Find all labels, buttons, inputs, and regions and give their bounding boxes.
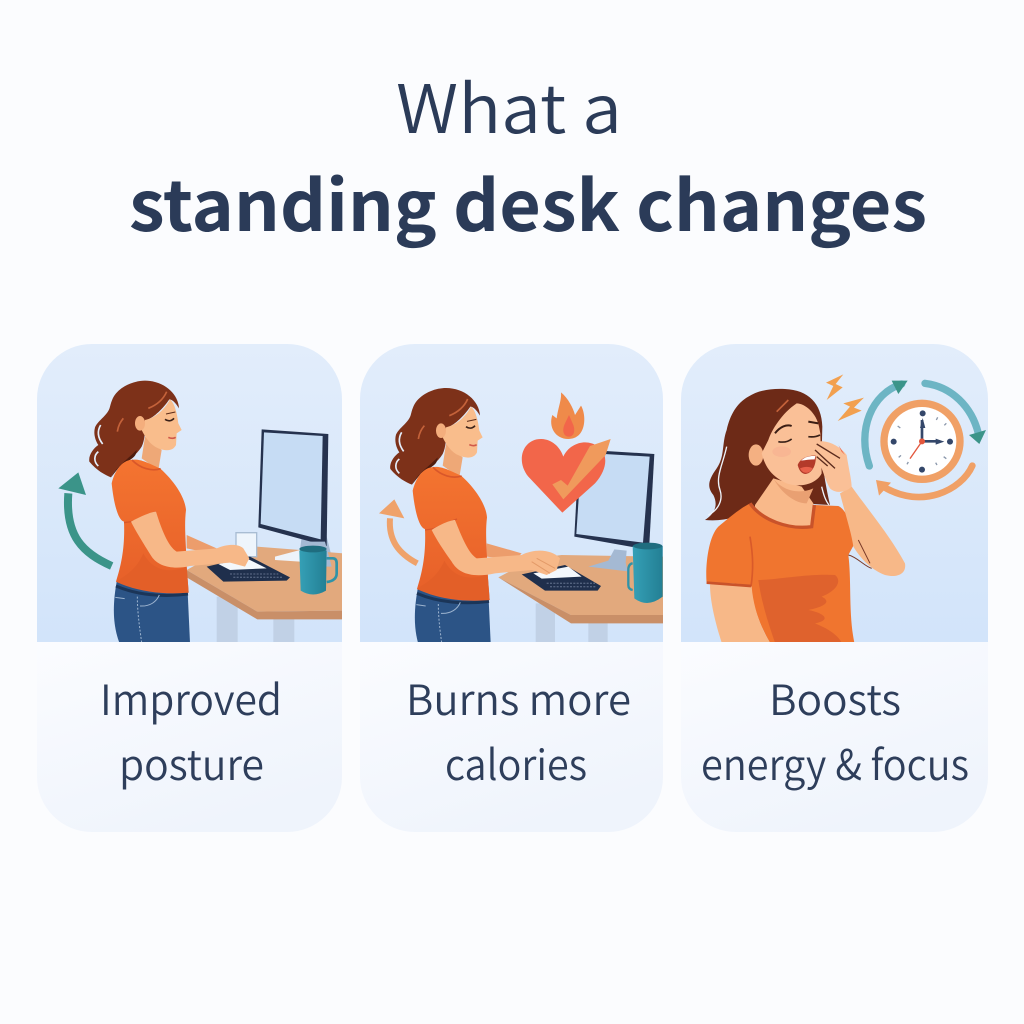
panel caption background	[360, 642, 663, 832]
panel caption: Improved	[100, 667, 282, 728]
panel: boosts energy and focus	[681, 344, 988, 832]
arrow up	[390, 518, 417, 563]
panel caption: energy & focus	[701, 732, 969, 793]
panel caption background	[37, 642, 342, 832]
panel caption: Boosts	[769, 667, 901, 728]
illustration: yawning woman and clock	[681, 344, 988, 643]
panel caption	[406, 667, 631, 793]
panel caption: calories	[445, 732, 587, 793]
panel caption: posture	[119, 732, 264, 793]
illustration: woman at standing desk	[37, 344, 343, 643]
panel caption	[100, 667, 282, 793]
title	[129, 56, 927, 252]
panel caption background	[681, 642, 988, 832]
panel: burns more calories	[360, 344, 663, 832]
panel: improved posture	[37, 344, 343, 832]
icon: flame	[551, 392, 584, 439]
panel caption: Burns more	[406, 667, 631, 728]
icon: heart with check	[522, 439, 611, 513]
title: What a	[396, 56, 622, 153]
title: standing desk changes	[129, 151, 927, 252]
panel caption	[701, 667, 969, 793]
illustration: woman with heart and flame	[360, 344, 663, 650]
icon: lightning bolts	[826, 374, 864, 421]
icon: clock with cycle arrows	[865, 381, 986, 497]
